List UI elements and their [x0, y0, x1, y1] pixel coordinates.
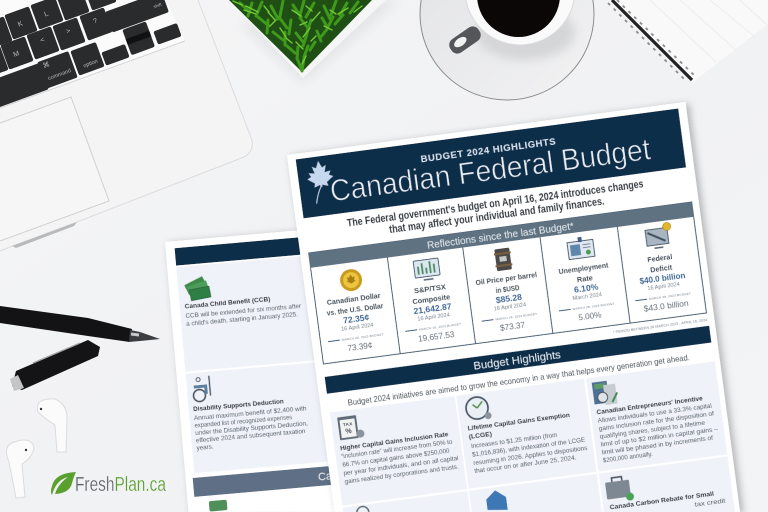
- card: Canada Carbon Rebate for Small: tax credit: [694, 498, 726, 509]
- column: Unemployment Rate: Rate: [576, 273, 593, 284]
- panel: Reflections since the last Budget: [308, 202, 706, 364]
- back page card: Disability Supports Deduction: effective 2024 and subsequent taxation: [196, 428, 306, 445]
- footnote: * PERIOD BETWEEN 28 MARCH 2023 - APRIL 16, 2024: [613, 318, 708, 334]
- column: Canadian Dollar: 72.35¢: [343, 312, 370, 325]
- icon: tax document: [337, 414, 365, 440]
- keyboard keys: shift: [153, 2, 163, 9]
- back page card: Canada Child Benefit: [176, 254, 335, 372]
- icon: tax document: %: [345, 428, 353, 436]
- section band: Budget Highlights: Budget Highlights: [473, 349, 562, 373]
- back page: [165, 227, 359, 512]
- column: Oil Price: MARCH 28, 2023 BUDGET: [495, 312, 537, 321]
- keyboard keys: M: [13, 50, 21, 59]
- card: Lifetime Capital Gains Exemption: $1,016,836), with indexation of the LCGE: [472, 437, 586, 459]
- keyboard keys: [0, 0, 182, 111]
- icon: ID card: [566, 235, 595, 260]
- icon: calculator and pen: [592, 380, 619, 406]
- back page grey section band: [193, 464, 354, 497]
- column: Canadian Dollar: vs. the U.S. Dollar: [326, 301, 384, 318]
- column: Canadian Dollar: 16 April 2024: [341, 323, 374, 333]
- column: S&P/TSX Composite: MARCH 28, 2023 BUDGET: [419, 322, 461, 332]
- back page card: Disability Supports Deduction: Annual maximum benefit of $2,400 with: [194, 405, 307, 422]
- keyboard keys: ?: [92, 18, 99, 26]
- highlights intro: Budget 2024 initiatives are aimed to grow the economy in a way that helps every generation get ahead.: [347, 352, 690, 408]
- column: Federal Deficit: 16 April 2024: [647, 282, 680, 292]
- header banner: BUDGET 2024 HIGHLIGHTS: [420, 136, 556, 165]
- column: Unemployment Rate: March 2024: [572, 292, 602, 302]
- column: S&P/TSX Composite: S&P/TSX: [413, 282, 446, 295]
- icon: briefcase: [604, 475, 635, 504]
- icon: wheelchair: [192, 376, 211, 402]
- icon: stock chart monitor: [413, 258, 441, 281]
- keyboard keys: L: [43, 11, 50, 19]
- card: Canadian Entrepreneurs' Incentive: qualifying shares, subject to a lifetime: [599, 420, 706, 441]
- laptop: [0, 0, 252, 251]
- card: Canadian Entrepreneurs' Incentive: Canadian Entrepreneurs' Incentive: [596, 395, 703, 416]
- card: Higher Capital Gains Inclusion Rate: “inclusion rate” will increase from 50% to: [341, 439, 453, 460]
- back page grey section band: Can: [318, 470, 339, 484]
- back page card: Canada Child Benefit: a child's death, starting in January 2025.: [186, 311, 298, 328]
- card: Higher Capital Gains Inclusion Rate: Higher Capital Gains Inclusion Rate: [340, 431, 449, 452]
- icon: banknotes: [184, 276, 211, 301]
- icon: oil barrel: [493, 247, 513, 271]
- card: Higher Capital Gains Inclusion Rate: 66.7% on capital gains above $250,000: [342, 448, 451, 469]
- intro text: The Federal government's budget on April 16, 2024 introduces changes: [346, 178, 644, 230]
- column: Federal Deficit: Federal: [647, 252, 673, 264]
- card: Canadian Entrepreneurs' Incentive: limit of up to $2 million in capital gains –: [601, 426, 719, 448]
- back page header band: [175, 235, 325, 266]
- card: Higher Capital Gains Inclusion Rate: gains realized by corporations and trusts.: [344, 463, 459, 486]
- keyboard keys: <: [39, 37, 46, 45]
- earbuds: [6, 399, 67, 498]
- section band: Budget Highlights: [325, 326, 711, 394]
- column: Oil Price: 16 April 2024: [493, 302, 527, 312]
- icon: green leaf: [51, 472, 76, 495]
- column: Unemployment Rate: 6.10%: [573, 282, 599, 295]
- column: S&P/TSX Composite: Composite: [412, 292, 451, 306]
- column: Oil Price: Oil Price per barrel: [475, 270, 538, 287]
- header banner: [296, 108, 686, 218]
- card: Canadian Entrepreneurs' Incentive: limit will be phased in by increments of: [602, 435, 714, 456]
- intro text: [346, 178, 646, 241]
- back page card: Disability Supports Deduction: years.: [196, 443, 214, 452]
- back page card: Canada Child Benefit: Canada Child Benefit (CCB): [184, 296, 271, 311]
- keyboard keys: ⌘: [42, 60, 51, 70]
- keyboard keys: >: [65, 28, 72, 36]
- pen: [0, 306, 160, 391]
- coffee cup on saucer: [420, 0, 594, 100]
- column: Oil Price: [471, 244, 544, 335]
- column: Canadian Dollar: MARCH 28, 2023 BUDGET: [342, 332, 384, 342]
- column: Oil Price: in $USD: [495, 283, 520, 295]
- spiral notebook: [608, 0, 768, 82]
- column: Federal Deficit: [626, 221, 693, 315]
- intro text: that may affect your individual and family finances.: [389, 196, 605, 236]
- column: S&P/TSX Composite: 19,657.53: [418, 330, 455, 344]
- header banner: Canadian Federal Budget: [328, 131, 653, 208]
- card: Canadian Entrepreneurs' Incentive: [586, 361, 727, 472]
- column: S&P/TSX Composite: 16 April 2024: [417, 312, 450, 323]
- icon: maple leaf: [305, 159, 336, 204]
- column: Oil Price: $73.37: [500, 320, 526, 333]
- card: Lifetime Capital Gains Exemption: that occur on or after June 25, 2024.: [474, 454, 577, 475]
- column: Canadian Dollar: 73.39¢: [347, 341, 373, 353]
- cup handle: [449, 26, 481, 54]
- icon: tax document: TAX: [342, 421, 353, 428]
- column: Federal Deficit: Deficit: [650, 263, 673, 274]
- card: Canada Carbon Rebate for Small: [599, 456, 735, 512]
- icon: deficit monitor with coin: [644, 222, 673, 249]
- back page card: Disability Supports Deduction: Disability Supports Deduction: [193, 398, 284, 413]
- card: Higher Capital Gains Inclusion Rate: per year for individuals, and on all capital: [343, 455, 459, 477]
- back page green icon: [209, 500, 228, 512]
- back page card: Disability Supports Deduction: [186, 361, 344, 473]
- icon: house: [485, 489, 508, 512]
- panel: Reflections since the last Budget: Reflections since the last Budget*: [427, 221, 575, 252]
- pen cap: [10, 340, 100, 391]
- card: Lifetime Capital Gains Exemption: Lifetime Capital Gains Exemption: [467, 412, 570, 432]
- keyboard keys: option: [83, 59, 99, 69]
- column: Unemployment Rate: 5.00%: [578, 310, 602, 322]
- back page card: Disability Supports Deduction: expanded list of recognized expenses: [194, 414, 293, 430]
- card: Lifetime Capital Gains Exemption: Increases to $1.25 million (from: [471, 432, 558, 450]
- FreshPlan.ca logo: FreshPlan.ca: [75, 474, 167, 496]
- main page: [287, 102, 740, 512]
- column: S&P/TSX Composite: [396, 256, 463, 345]
- card: bottom row left: [343, 491, 470, 512]
- card: Higher Capital Gains Inclusion Rate: [330, 396, 467, 506]
- card: Canadian Entrepreneurs' Incentive: gains inclusion rate for the disposition of: [598, 410, 715, 433]
- plant in white pot: [229, 0, 390, 80]
- card: Canadian Entrepreneurs' Incentive: $200,000 annually.: [603, 451, 653, 464]
- keyboard keys: K: [17, 20, 24, 29]
- column: Federal Deficit: MARCH 28, 2023 BUDGET: [649, 291, 691, 301]
- keyboard keys: command: [47, 68, 72, 82]
- card: Lifetime Capital Gains Exemption: (LCGE): [468, 431, 492, 441]
- back page card: Canada Child Benefit: CCB will be extended for six months after: [185, 303, 301, 320]
- card: bottom row middle: [469, 474, 602, 512]
- back page card: Disability Supports Deduction: under the Disability Supports Deduction,: [195, 420, 308, 437]
- card: Canada Carbon Rebate for Small: Canada Carbon Rebate for Small: [609, 491, 714, 511]
- column: Unemployment Rate: [550, 234, 616, 325]
- card: Canadian Entrepreneurs' Incentive: Allows individuals to use a 33.3% capital: [597, 403, 712, 425]
- column: Unemployment Rate: MARCH 28, 2023 BUDGET: [573, 302, 615, 311]
- column: Canadian Dollar: Canadian Dollar: [326, 291, 381, 307]
- icon: clock: [465, 395, 492, 422]
- card: Lifetime Capital Gains Exemption: [456, 379, 596, 489]
- column: Canadian Dollar: [319, 265, 389, 356]
- column: S&P/TSX Composite: 21,642.87: [413, 301, 452, 316]
- column: Federal Deficit: $40.0 billion: [639, 270, 686, 286]
- card: Lifetime Capital Gains Exemption: resuming in 2026. Applies to dispositions: [473, 445, 588, 467]
- icon: gold coin: [339, 268, 363, 292]
- column: Federal Deficit: $43.0 billion: [643, 299, 690, 314]
- column: Oil Price: $85.28: [495, 292, 523, 305]
- FreshPlan.ca logo: [51, 472, 167, 496]
- column: Unemployment Rate: Unemployment: [558, 260, 609, 276]
